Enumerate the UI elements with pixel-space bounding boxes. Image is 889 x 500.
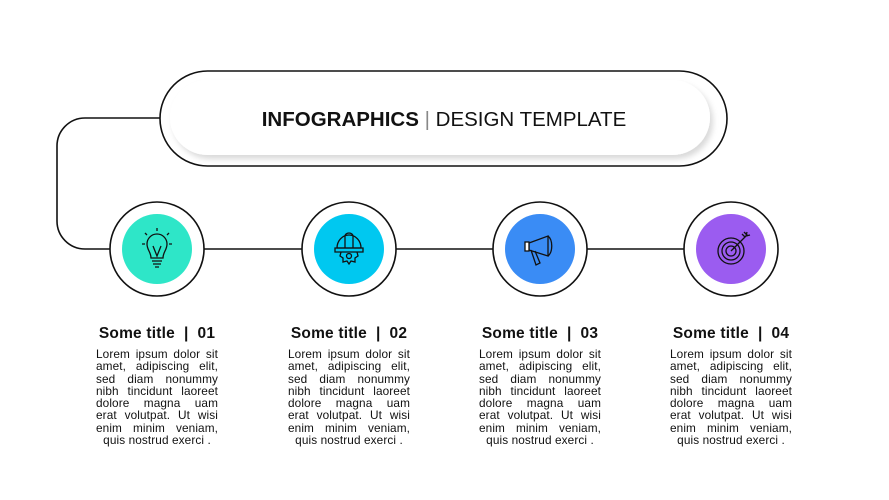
column 3 text: Some title | 03 [482, 325, 598, 342]
column 3 text: Lorem ipsum dolor sit [479, 347, 601, 361]
column 3 text: quis nostrud exerci . [486, 433, 594, 447]
column 3 text: sed diam nonummy [479, 372, 601, 386]
column 4 text: Lorem ipsum dolor sit [670, 347, 792, 361]
step 1 circle: lightbulb [110, 202, 204, 296]
step 3 circle: megaphone [493, 202, 587, 296]
step 2 circle: helmet gear [302, 202, 396, 296]
title text: INFOGRAPHICS | DESIGN TEMPLATE [262, 108, 626, 131]
column 1 text: dolore magna uam [96, 396, 218, 410]
column 1 text: enim minim veniam, [96, 421, 218, 435]
column 4 text: dolore magna uam [670, 396, 792, 410]
column 1 text: Some title | 01 [99, 325, 215, 342]
column 1 text: Lorem ipsum dolor sit [96, 347, 218, 361]
column 2 text: erat volutpat. Ut wisi [288, 408, 410, 422]
column 1 text: nibh tincidunt laoreet [96, 384, 218, 398]
title pill [160, 71, 727, 166]
column 2 text: nibh tincidunt laoreet [288, 384, 410, 398]
column 2 text: amet, adipiscing elit, [288, 359, 410, 373]
column 3 text [479, 325, 601, 447]
column 1 text: sed diam nonummy [96, 372, 218, 386]
column 1 text: amet, adipiscing elit, [96, 359, 218, 373]
column 2 text: Lorem ipsum dolor sit [288, 347, 410, 361]
column 2 text: quis nostrud exerci . [295, 433, 403, 447]
column 3 text: dolore magna uam [479, 396, 601, 410]
column 1 text: quis nostrud exerci . [103, 433, 211, 447]
connector line [57, 118, 684, 249]
column 2 text [288, 325, 410, 447]
column 4 text: quis nostrud exerci . [677, 433, 785, 447]
column 3 text: amet, adipiscing elit, [479, 359, 601, 373]
column 2 text: sed diam nonummy [288, 372, 410, 386]
column 1 text: erat volutpat. Ut wisi [96, 408, 218, 422]
column 4 text: Some title | 04 [673, 325, 789, 342]
column 2 text: enim minim veniam, [288, 421, 410, 435]
column 3 text: nibh tincidunt laoreet [479, 384, 601, 398]
column 4 text: sed diam nonummy [670, 372, 792, 386]
step 4 circle: target [684, 202, 778, 296]
column 3 text: enim minim veniam, [479, 421, 601, 435]
column 4 text: erat volutpat. Ut wisi [670, 408, 792, 422]
column 2 text: Some title | 02 [291, 325, 407, 342]
column 3 text: erat volutpat. Ut wisi [479, 408, 601, 422]
column 4 text: nibh tincidunt laoreet [670, 384, 792, 398]
column 1 text [96, 325, 218, 447]
column 4 text: enim minim veniam, [670, 421, 792, 435]
column 4 text: amet, adipiscing elit, [670, 359, 792, 373]
column 2 text: dolore magna uam [288, 396, 410, 410]
column 4 text [670, 325, 792, 447]
